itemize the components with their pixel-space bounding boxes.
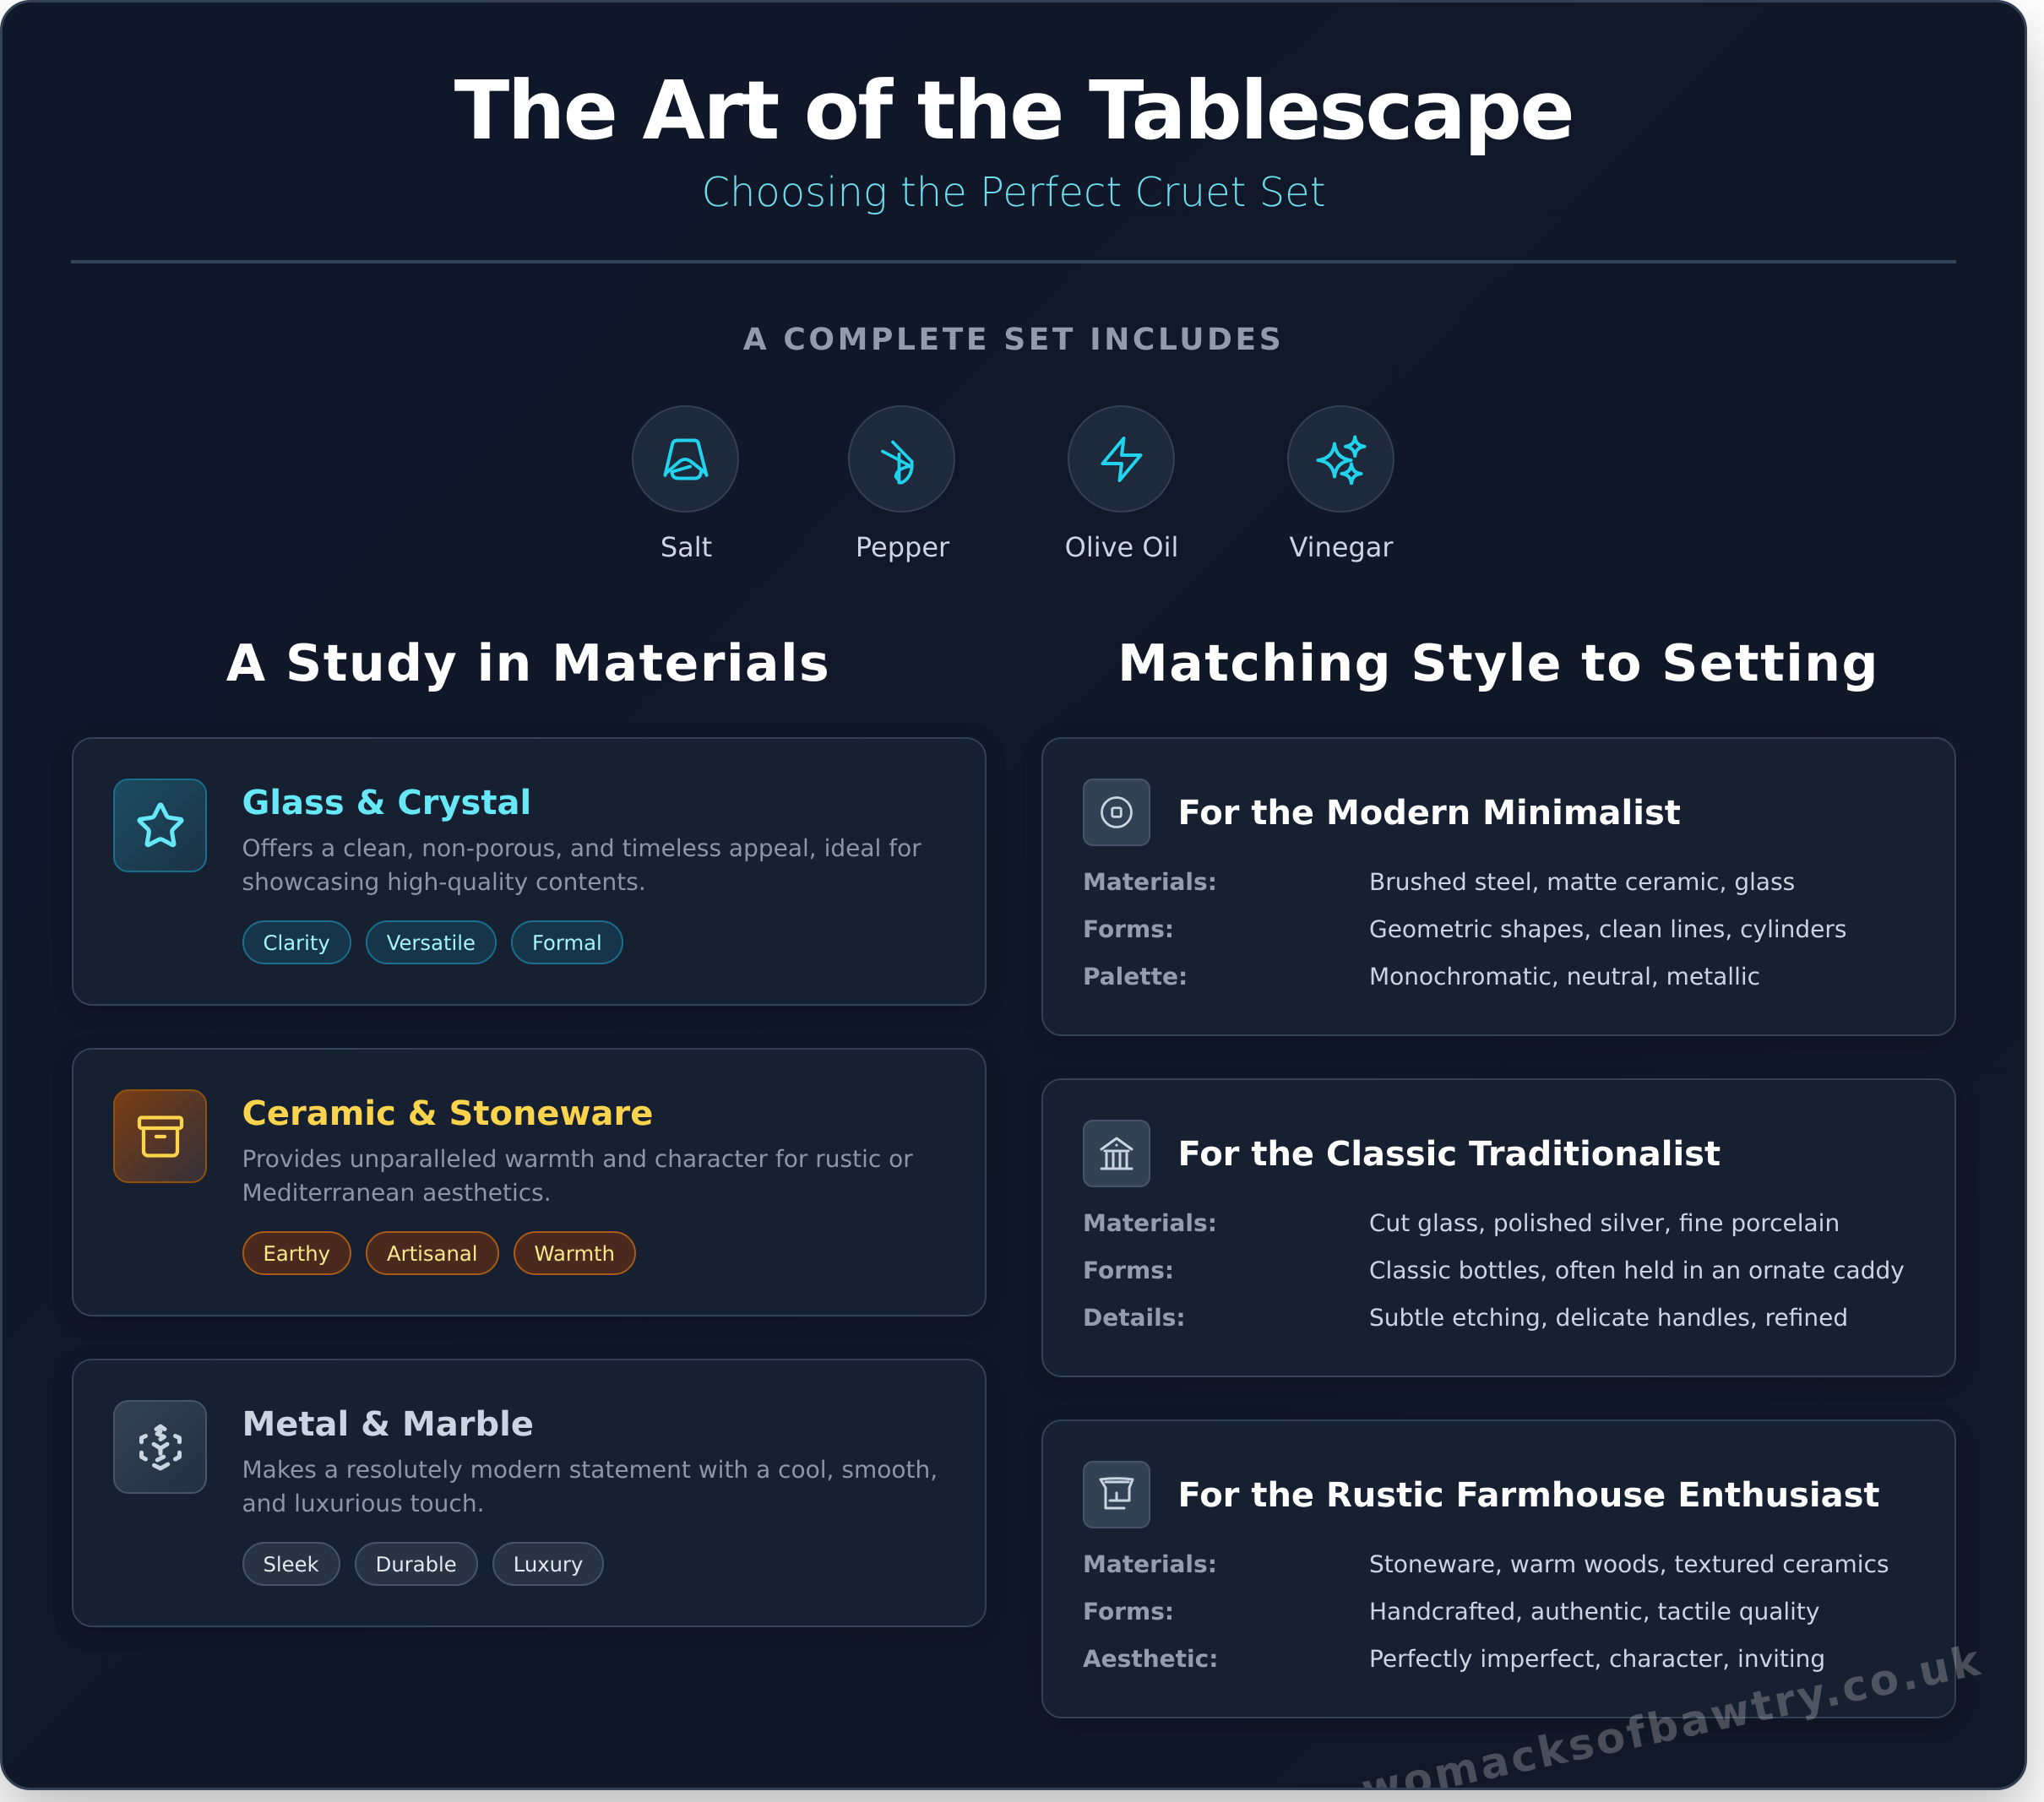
row value: Brushed steel, matte ceramic, glass <box>1369 868 1795 896</box>
tags: Formal <box>532 931 602 955</box>
subtitle: Choosing the Perfect Cruet Set <box>701 169 1326 216</box>
icon: olive oil <box>1068 405 1175 513</box>
icon: dashed box <box>113 1400 207 1494</box>
row value: Handcrafted, authentic, tactile quality <box>1369 1598 1819 1626</box>
heading: matching style to setting: Matching Style to Setting <box>1117 633 1879 692</box>
tags <box>242 1231 636 1275</box>
row value: Stoneware, warm woods, textured ceramics <box>1369 1550 1889 1578</box>
description line 2: and luxurious touch. <box>242 1490 484 1517</box>
description line 1: Provides unparalleled warmth and character for rustic or <box>242 1145 913 1173</box>
row value: Classic bottles, often held in an ornate caddy <box>1369 1257 1905 1284</box>
row label: Aesthetic: <box>1083 1645 1218 1673</box>
row label: Forms: <box>1083 915 1174 943</box>
card title: For the Rustic Farmhouse Enthusiast <box>1177 1476 1880 1515</box>
row value: Subtle etching, delicate handles, refined <box>1369 1304 1848 1332</box>
icon: landmark <box>1083 1120 1150 1187</box>
row value: Perfectly imperfect, character, inviting <box>1369 1645 1825 1673</box>
card title: For the Modern Minimalist <box>1177 794 1681 833</box>
tags: Luxury <box>514 1552 583 1577</box>
row label: Forms: <box>1083 1257 1174 1284</box>
card title: Ceramic & Stoneware <box>242 1094 653 1133</box>
panel: metal and marble <box>71 1359 987 1627</box>
row label: Palette: <box>1083 963 1188 991</box>
tags: Versatile <box>387 931 476 955</box>
label: salt: Salt <box>660 531 712 563</box>
label: pepper: Pepper <box>856 531 949 563</box>
description line 1: Makes a resolutely modern statement with a cool, smooth, <box>242 1456 938 1484</box>
row value: Cut glass, polished silver, fine porcelain <box>1369 1209 1840 1237</box>
icon: pepper <box>848 405 955 513</box>
card title: Metal & Marble <box>242 1405 534 1444</box>
heading: a study in materials: A Study in Materials <box>226 633 830 692</box>
panel: ceramic and stoneware <box>71 1048 987 1316</box>
row label: Materials: <box>1083 1550 1217 1578</box>
tags: Earthy <box>264 1241 330 1266</box>
label: vinegar: Vinegar <box>1289 531 1394 563</box>
row value: Monochromatic, neutral, metallic <box>1369 963 1760 991</box>
panel: rustic farmhouse enthusiast <box>1041 1419 1956 1718</box>
tags: Warmth <box>535 1241 615 1266</box>
icon: archive <box>113 1089 207 1183</box>
icon: vinegar <box>1287 405 1394 513</box>
panel: modern minimalist <box>1041 737 1956 1036</box>
icon: circle stop <box>1083 779 1150 846</box>
card title: Glass & Crystal <box>242 784 531 822</box>
tags: Artisanal <box>387 1241 478 1266</box>
icon: salt <box>632 405 739 513</box>
tags: Clarity <box>264 931 330 955</box>
title: The Art of the Tablescape <box>454 63 1573 158</box>
tags: Durable <box>376 1552 457 1577</box>
tags <box>242 1542 604 1586</box>
panel: classic traditionalist <box>1041 1078 1956 1377</box>
panel: glass and crystal <box>71 737 987 1006</box>
description line 2: showcasing high-quality contents. <box>242 868 646 896</box>
label: olive oil: Olive Oil <box>1065 531 1178 563</box>
tags: Sleek <box>264 1552 319 1577</box>
icon: star <box>113 779 207 872</box>
row label: Materials: <box>1083 1209 1217 1237</box>
tags <box>242 920 623 964</box>
row label: Forms: <box>1083 1598 1174 1626</box>
section label: a complete set includes: A COMPLETE SET INCLUDES <box>743 323 1284 357</box>
card title: For the Classic Traditionalist <box>1177 1135 1721 1174</box>
row label: Materials: <box>1083 868 1217 896</box>
icon: rustic vessel <box>1083 1461 1150 1528</box>
row value: Geometric shapes, clean lines, cylinders <box>1369 915 1846 943</box>
description line 1: Offers a clean, non-porous, and timeless appeal, ideal for <box>242 834 921 862</box>
description line 2: Mediterranean aesthetics. <box>242 1179 552 1207</box>
row label: Details: <box>1083 1304 1186 1332</box>
